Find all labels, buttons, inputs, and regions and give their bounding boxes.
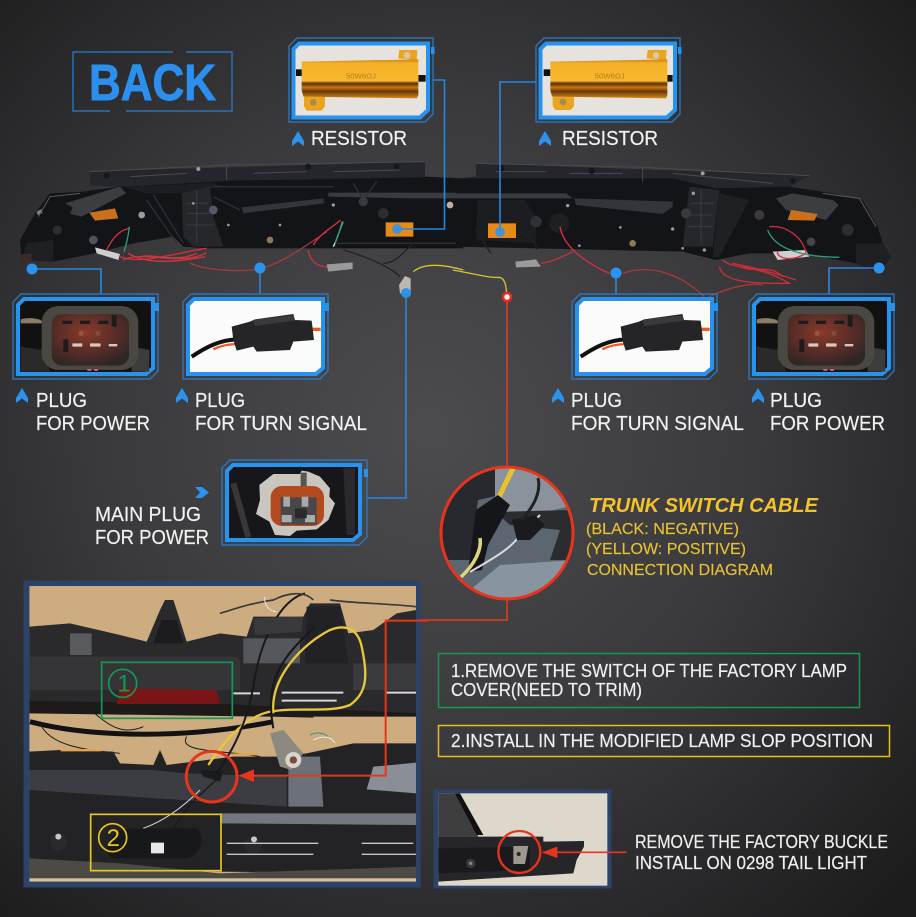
callout dots [26,224,884,298]
label: plug for turn signal left: PLUG [195,389,245,412]
resistor body: 50W6ΩJ [595,74,625,81]
panel: install photo [25,582,428,886]
label: plug for power left [16,388,150,435]
red dot [503,293,511,301]
connector photo [581,314,710,357]
right half of lamp bar [453,163,891,297]
panel: main plug for power [222,460,368,545]
connector photo [233,468,355,537]
text: buckle note: INSTALL ON 0298 TAIL LIGHT [635,853,867,873]
text: buckle note [635,832,888,873]
connector photo [757,306,885,372]
connector photo [21,306,149,372]
rear lamp assembly [20,162,891,297]
label: plug for power right: FOR POWER [770,412,885,435]
resistor body [296,50,426,111]
label: main plug for power [95,487,209,549]
heading: trunk switch cable: TRUNK SWITCH CABLE [589,494,819,517]
green box 1 [102,662,232,718]
label: plug for turn signal right: PLUG [571,389,622,412]
yellow instruction box [438,726,890,756]
label: plug for power left: PLUG [36,389,87,412]
label: plug for turn signal left [176,388,367,435]
text: buckle note: REMOVE THE FACTORY BUCKLE [635,832,888,852]
panel: plug for turn signal left [183,294,329,379]
yellow box 2: 2 [107,825,120,852]
panel: buckle photo [435,791,627,887]
yellow instruction box: 2.INSTALL IN THE MODIFIED LAMP SLOP POSITION [451,731,873,751]
title: BACK: BACK [89,54,216,111]
red circle and arrow [186,621,428,802]
text: connection notes: (BLACK: NEGATIVE) [586,521,739,538]
panel: plug for power left [13,294,159,379]
panel: resistor right [536,38,682,122]
panel: plug for power right [749,294,895,379]
label: plug for turn signal right: FOR TURN SIGNAL [571,412,744,435]
green instruction box [438,654,860,708]
green instruction box: 1.REMOVE THE SWITCH OF THE FACTORY LAMP [451,661,847,681]
text: connection notes: CONNECTION DIAGRAM [587,562,773,579]
label: resistor left: RESISTOR [311,127,407,150]
label: main plug for power: MAIN PLUG [95,503,201,526]
label: plug for power right [752,388,885,435]
resistor body [544,50,673,110]
label: resistor right: RESISTOR [562,127,658,150]
green instruction box: COVER(NEED TO TRIM) [451,680,642,700]
connector lines [32,80,879,498]
label: plug for power right: PLUG [770,389,822,412]
yellow box 2 [91,814,221,871]
label: plug for turn signal right [552,388,744,435]
label: main plug for power: FOR POWER [95,526,209,549]
left half of lamp bar [20,162,463,293]
red trunk cable line [385,297,507,775]
text: connection notes [586,521,773,579]
trunk switch cable circle [440,466,575,600]
text: connection notes: (YELLOW: POSITIVE) [586,541,746,558]
label: plug for power left: FOR POWER [36,412,150,435]
label: plug for turn signal left: FOR TURN SIGNAL [195,412,367,435]
panel: plug for turn signal right [572,294,718,379]
green box 1: 1 [117,670,131,697]
resistor body: 50W6ΩJ [346,74,376,81]
panel: resistor left [289,38,434,122]
connector photo [192,314,321,357]
